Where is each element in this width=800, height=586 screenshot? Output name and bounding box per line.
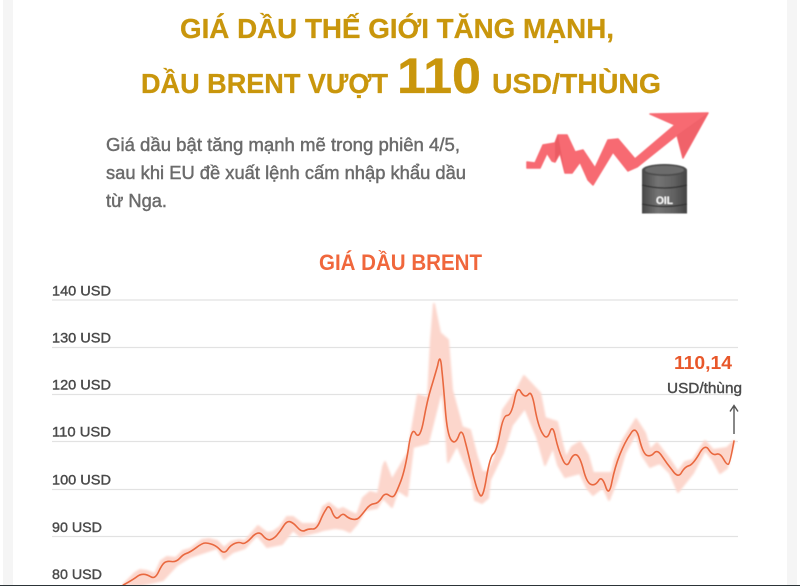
line chart: Brent price	[52, 282, 738, 585]
price line	[123, 359, 734, 585]
high-low range band	[123, 304, 734, 585]
gridlines and axis labels	[52, 282, 738, 582]
callout: latest price: USD/thùng	[667, 381, 742, 397]
gridlines and axis labels: 90 USD	[52, 519, 102, 535]
chart title: GIÁ DẦU BRENT	[319, 250, 483, 275]
callout: latest price	[667, 353, 742, 397]
gridlines and axis labels: 130 USD	[52, 330, 111, 346]
title: GIÁ DẦU THẾ GIỚI TĂNG MẠNH,	[180, 13, 614, 44]
arrow: up to latest price	[730, 406, 738, 434]
title: 110	[397, 48, 481, 104]
gridlines and axis labels: 120 USD	[52, 376, 111, 392]
callout: latest price: 110,14	[674, 353, 732, 373]
intro text: sau khi EU đề xuất lệnh cấm nhập khẩu dầu	[106, 162, 466, 183]
icon: oil barrel: OIL	[656, 195, 673, 207]
icon: rising red arrow	[527, 113, 708, 185]
intro text: Giá dầu bật tăng mạnh mẽ trong phiên 4/5,	[106, 134, 460, 155]
title: DẦU BRENT VƯỢT	[141, 68, 388, 99]
gridlines and axis labels: 140 USD	[52, 282, 111, 298]
gridlines and axis labels: 100 USD	[52, 472, 111, 488]
gridlines and axis labels: 110 USD	[52, 424, 111, 440]
gridlines and axis labels: 80 USD	[52, 566, 102, 582]
intro text: từ Nga.	[106, 190, 167, 211]
title	[141, 13, 661, 104]
icon: oil barrel	[642, 164, 687, 214]
title: USD/THÙNG	[492, 68, 661, 99]
intro text	[106, 134, 466, 211]
